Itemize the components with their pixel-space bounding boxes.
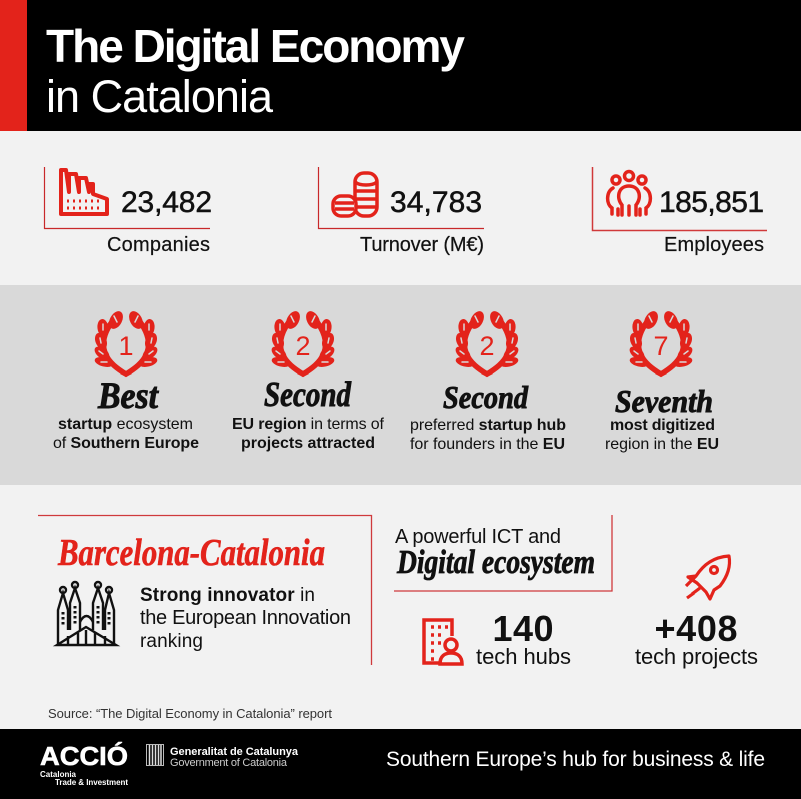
stat: turnover xyxy=(318,167,484,256)
ranking: best: Best xyxy=(97,376,160,417)
logo: Generalitat xyxy=(146,744,299,769)
icon: Sagrada Familia xyxy=(57,582,116,645)
icon: factory xyxy=(61,170,107,214)
panel: Barcelona-Catalonia: Barcelona-Catalonia xyxy=(57,532,325,574)
stat: tech hubs xyxy=(424,608,571,669)
stat: turnover: 34,783 xyxy=(390,186,482,219)
stat: companies: Companies xyxy=(107,234,210,256)
panel: Barcelona-Catalonia: Strong innovator in xyxy=(140,585,315,606)
stat: tech projects: tech projects xyxy=(635,644,758,669)
ranking: second EU region: 2 xyxy=(295,331,311,361)
tagline: Southern Europe’s hub for business & life xyxy=(386,748,765,771)
header banner: The Digital Economy xyxy=(46,20,465,72)
panel: Barcelona-Catalonia xyxy=(38,516,372,665)
icon: rocket xyxy=(686,556,730,599)
ranking: second EU region: EU region in terms of xyxy=(232,416,385,433)
stat: companies xyxy=(44,167,212,256)
logo: ACCIO: Catalonia xyxy=(40,770,77,779)
panel: ICT ecosystem heading: Digital ecosystem xyxy=(396,544,595,581)
ranking: second EU region: projects attracted xyxy=(241,435,375,452)
stat: employees: Employees xyxy=(664,234,764,256)
ranking: seventh: most digitized xyxy=(610,417,715,434)
logo: ACCIO: Trade & Investment xyxy=(55,778,128,787)
footer xyxy=(0,729,801,799)
ranking: second startup hub xyxy=(410,309,566,453)
ranking: best: startup ecosystem xyxy=(58,416,193,433)
ranking: second startup hub: for founders in the EU xyxy=(410,436,565,453)
ranking: second startup hub: preferred startup hub xyxy=(410,417,566,434)
stat: tech projects xyxy=(635,556,758,669)
stat: tech hubs: tech hubs xyxy=(476,644,571,669)
logo: Generalitat: Government of Catalonia xyxy=(170,757,288,769)
ranking: second EU region xyxy=(232,309,385,452)
ranking: best xyxy=(53,309,199,452)
source note: Source: “The Digital Economy in Catalonia” report xyxy=(48,706,332,721)
logo: Generalitat: Generalitat de Catalunya xyxy=(170,746,299,758)
stat: companies: 23,482 xyxy=(121,186,212,219)
stat: tech hubs: 140 xyxy=(492,608,554,649)
panel: rankings xyxy=(0,285,801,485)
ranking: second EU region: Second xyxy=(264,375,351,414)
icon: coins xyxy=(333,173,377,216)
logo: ACCIO xyxy=(40,741,128,787)
header banner xyxy=(0,0,801,131)
ranking: seventh: Seventh xyxy=(615,383,713,419)
stat: tech projects: +408 xyxy=(654,608,738,649)
ranking: seventh: 7 xyxy=(653,331,669,361)
icon: people xyxy=(608,172,650,215)
panel: ICT ecosystem heading: A powerful ICT and xyxy=(395,526,561,548)
icon: building with person xyxy=(424,620,462,664)
header banner: in Catalonia xyxy=(46,71,274,122)
ranking: seventh: region in the EU xyxy=(605,436,719,453)
stat: employees: 185,851 xyxy=(659,186,764,219)
ranking: seventh xyxy=(605,309,719,453)
ranking: second startup hub: Second xyxy=(443,379,529,415)
panel: Barcelona-Catalonia: ranking xyxy=(140,631,203,652)
ranking: best: of Southern Europe xyxy=(53,435,199,452)
logo: ACCIO: ACCIÓ xyxy=(40,741,128,771)
ranking: second startup hub: 2 xyxy=(479,331,495,361)
ranking: best: 1 xyxy=(118,331,134,361)
stat: turnover: Turnover (M€) xyxy=(360,234,484,256)
stat: employees xyxy=(592,167,767,256)
panel: Barcelona-Catalonia: the European Innovation xyxy=(140,607,351,629)
panel: ICT ecosystem heading xyxy=(394,515,612,591)
